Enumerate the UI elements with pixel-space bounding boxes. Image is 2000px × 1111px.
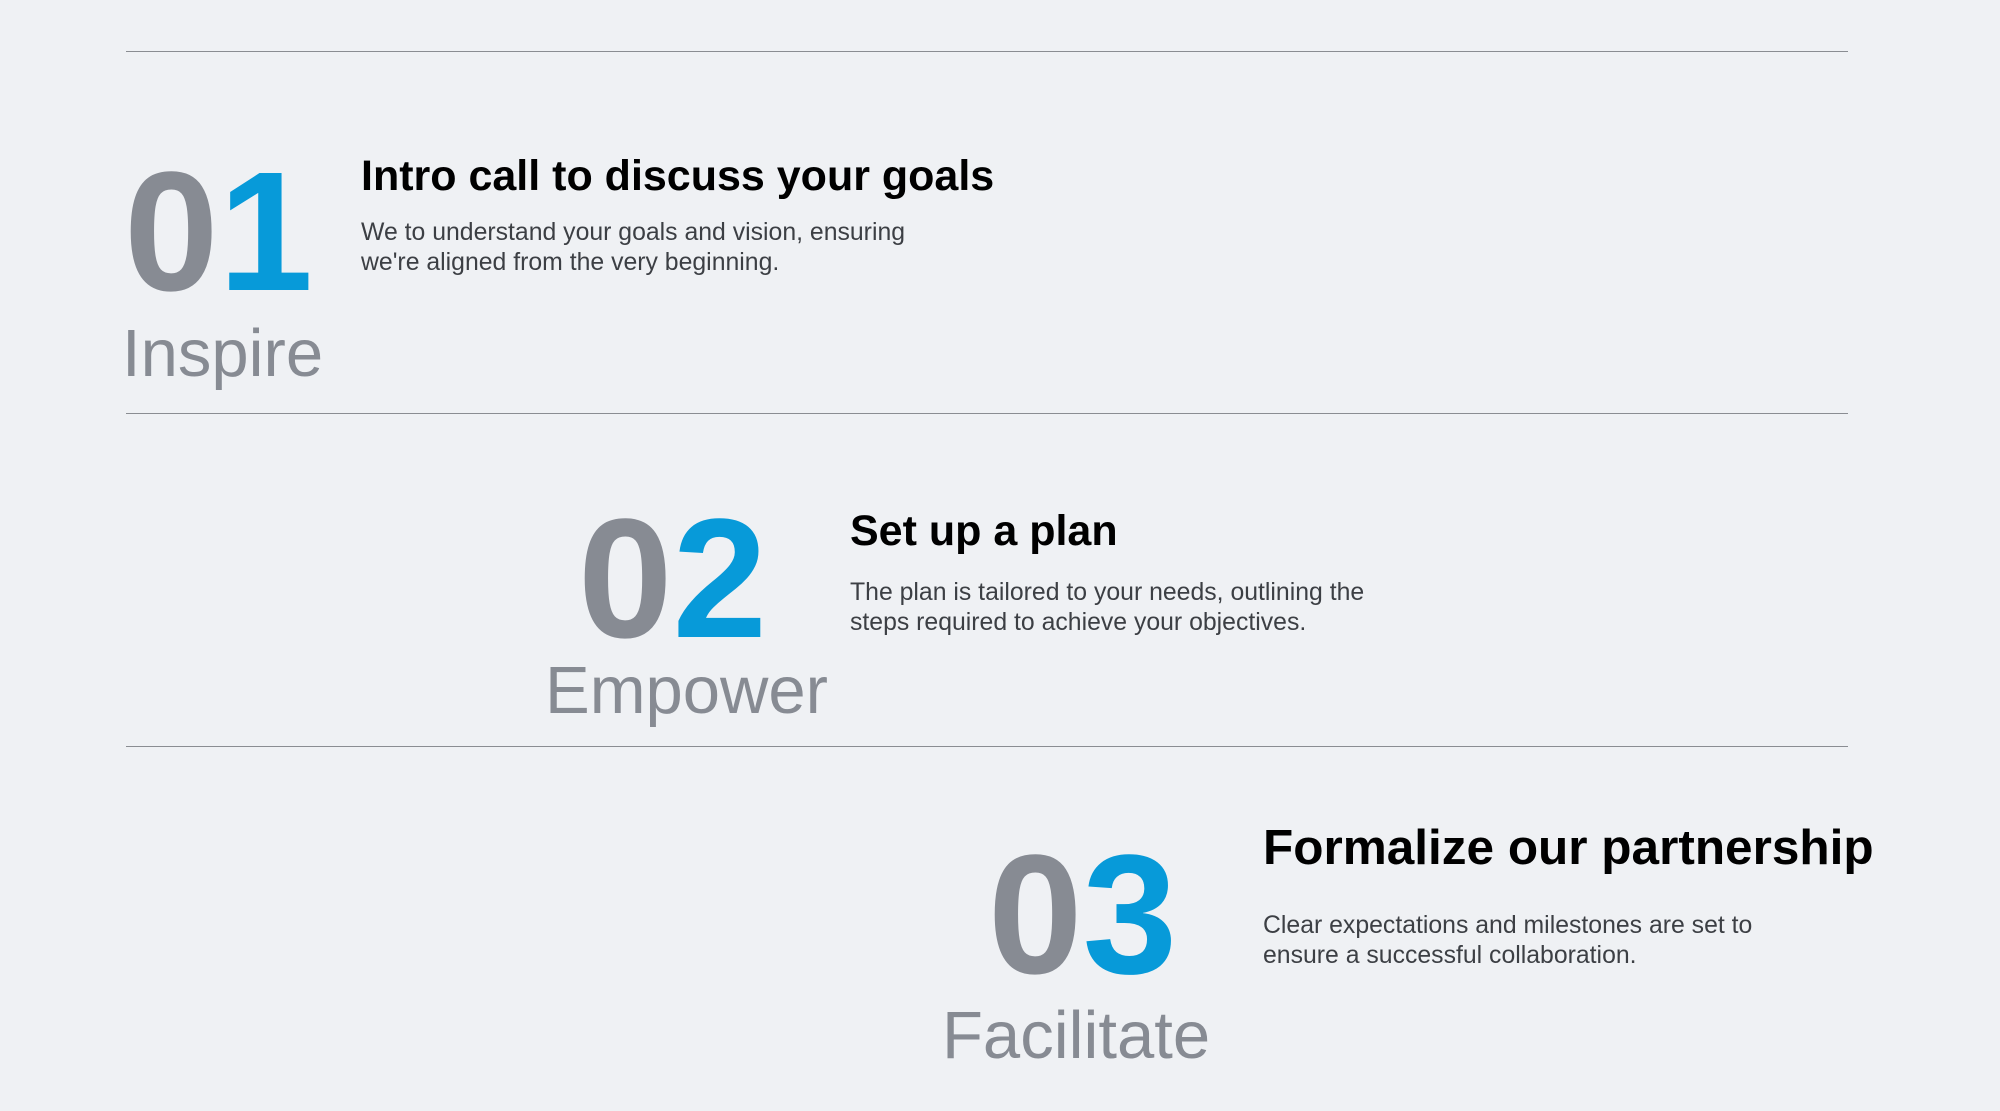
step 01 description: we're aligned from the very beginning. <box>361 249 779 276</box>
step 01 label: Inspire: Inspire <box>122 316 323 391</box>
step 02 label: Empower: Empower <box>545 653 828 728</box>
step 02 description <box>850 579 1364 636</box>
step 02 number: 02 <box>578 484 767 674</box>
step 03 description: Clear expectations and milestones are set to <box>1263 912 1752 939</box>
step 03 title: Formalize our partnership <box>1263 820 1874 875</box>
step 01 title: Intro call to discuss your goals <box>361 152 994 200</box>
step 02 description: steps required to achieve your objectives. <box>850 609 1306 636</box>
step 02 title: Set up a plan <box>850 507 1118 555</box>
step 03 number: 03 <box>988 820 1177 1010</box>
step 02 description: The plan is tailored to your needs, outlining the <box>850 579 1364 606</box>
step 01 description <box>361 219 905 276</box>
step 03 description <box>1263 912 1752 969</box>
step 01 number: 01 <box>124 137 313 327</box>
step 03 label: Facilitate: Facilitate <box>942 998 1210 1073</box>
step 03 description: ensure a successful collaboration. <box>1263 942 1637 969</box>
step 01 description: We to understand your goals and vision, ensuring <box>361 219 905 246</box>
